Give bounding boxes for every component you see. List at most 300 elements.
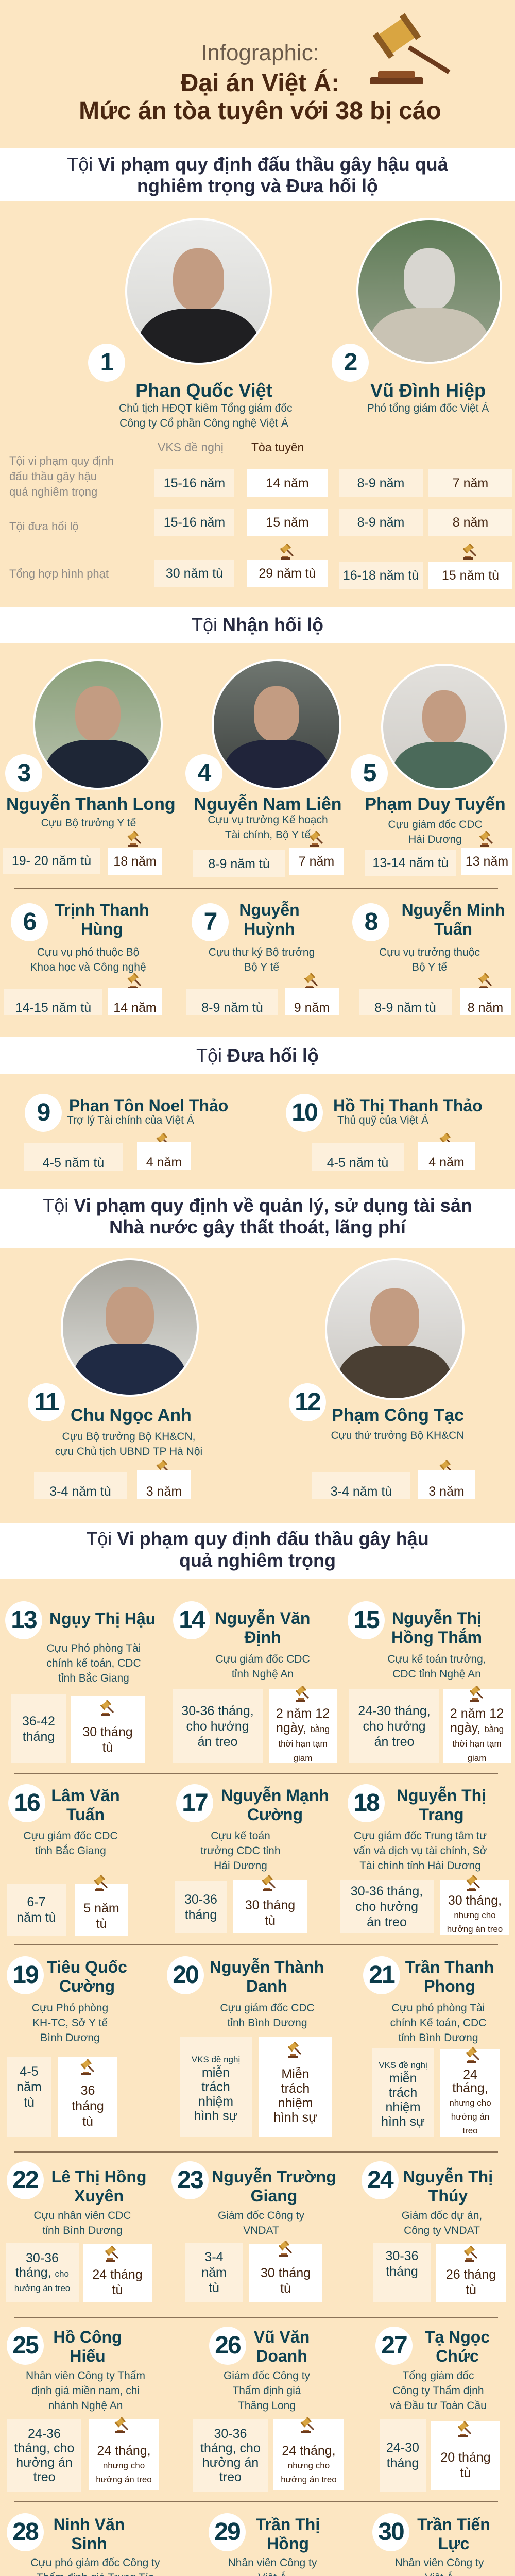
role: Thủ quỹ của Việt Á [337, 1114, 428, 1126]
role: Cựu kế toán [211, 1830, 270, 1842]
role [176, 2208, 346, 2238]
title: Infographic: Infographic: [201, 40, 319, 65]
badge 3: 3 [18, 759, 30, 787]
name [198, 1786, 352, 1824]
section heading: đấu thầu gây hậu quả nghiêm trọng: quả nghiêm trọng [179, 1550, 336, 1571]
badge 29: 29 [214, 2518, 240, 2546]
card: 17 Nguyễn Mạnh Cường: 30-36 [184, 1892, 217, 1906]
card: 27 Tạ Ngọc Chức [353, 2327, 513, 2493]
name [190, 1958, 344, 1996]
name [10, 2328, 165, 2366]
role [353, 2368, 515, 2413]
badge 25: 25 [12, 2332, 38, 2359]
name: Phạm Công Tạc [332, 1405, 464, 1425]
role [182, 2368, 352, 2413]
role: Thẩm định giá [232, 2385, 301, 2397]
card: 19 Tiêu Quốc Cường: tù [24, 2095, 35, 2109]
name: Vũ Đình Hiệp [370, 380, 486, 401]
badge 30: 30 [378, 2518, 404, 2546]
card: 20 Nguyễn Thành Danh: miễn [202, 2065, 230, 2079]
role: Cựu giám đốc CDC [23, 1830, 118, 1842]
card: 21 Trần Thanh Phong: nhưng cho [449, 2098, 491, 2107]
row label 1: Tội vi phạm quy định [9, 454, 114, 467]
badge 3 [5, 754, 42, 792]
badge 17: 17 [182, 1789, 208, 1817]
icon: big gavel [370, 13, 450, 84]
name: Nguyễn Thị [392, 1609, 482, 1628]
card: 5 Phạm Duy Tuyến: 13-14 năm tù [372, 856, 449, 870]
badge 22: 22 [12, 2166, 38, 2194]
photo [33, 659, 163, 790]
card: 12 Phạm Công Tạc: 3-4 năm tù [331, 1484, 392, 1499]
name: Xuyên [74, 2187, 124, 2205]
role [55, 1431, 202, 1458]
role: Công ty VNDAT [404, 2225, 480, 2236]
badge 19: 19 [12, 1961, 38, 1989]
role [178, 1652, 348, 1682]
badge 23: 23 [177, 2166, 203, 2194]
icon: gavel [478, 973, 492, 988]
card: 3 Nguyễn Thanh Long [3, 659, 176, 875]
table: sentences for #1 and #2: 29 năm tù [259, 566, 316, 581]
header court: Tòa tuyên [251, 440, 304, 454]
role [0, 2208, 167, 2238]
section heading: quản lý tài sản Nhà nước: Tội Vi phạm quy định về quản lý, sử dụng tài sản [43, 1195, 472, 1216]
name: Trịnh Thanh [55, 901, 149, 919]
table: sentences for #1 and #2: 15-16 năm [164, 515, 225, 530]
role: Giám đốc Công ty [224, 2370, 310, 2382]
role: và Đầu tư Toàn Cầu [390, 2400, 487, 2412]
card: 14 Nguyễn Văn Định: giam [294, 1753, 312, 1763]
card: 18 Nguyễn Thị Trang: cho hưởng [355, 1899, 418, 1913]
card: 24 Nguyễn Thị Thúy: 30-36 [386, 2249, 418, 2263]
table: sentences for #1 and #2: 16-18 năm tù [343, 568, 419, 583]
name: Sinh [71, 2534, 107, 2553]
role [379, 946, 480, 973]
name: Nguyễn [239, 901, 300, 919]
role [328, 1828, 513, 1873]
card: 24 Nguyễn Thị Thúy: 26 tháng [446, 2267, 496, 2282]
photo [325, 1258, 465, 1400]
name [372, 1958, 515, 1996]
name: Huỳnh [244, 920, 295, 938]
card: 20 Nguyễn Thành Danh: nhiệm [278, 2096, 313, 2110]
role [0, 2001, 155, 2045]
card: 21 Trần Thanh Phong: tháng, [452, 2080, 488, 2095]
icon: gavel [479, 831, 493, 847]
card: 25 Hồ Công Hiếu: treo [33, 2470, 56, 2484]
section heading: Đưa hối lộ: Tội Đưa hối lộ [196, 1045, 319, 1066]
role: tỉnh Bình Dương [42, 2225, 123, 2236]
card: 20 Nguyễn Thành Danh [165, 1956, 340, 2138]
icon: gavel [466, 1875, 482, 1893]
table: sentences for #1 and #2: 7 năm [453, 476, 488, 490]
badge 20: 20 [173, 1961, 198, 1989]
name [22, 2167, 176, 2206]
card: 25 Hồ Công Hiếu: tháng, cho [14, 2441, 74, 2455]
card: 6 Trịnh Thanh Hùng: 14-15 năm tù [15, 1001, 91, 1015]
photo [212, 659, 341, 790]
card: 20 Nguyễn Thành Danh: Miễn [281, 2067, 310, 2081]
role: tỉnh Bắc Giang [58, 1672, 129, 1684]
role: Cựu Bộ trưởng Bộ KH&CN, [62, 1431, 195, 1443]
card: 25 Hồ Công Hiếu: hưởng án [16, 2455, 73, 2470]
icon: gavel [114, 2417, 130, 2435]
name: Định [244, 1628, 281, 1647]
icon: gavel [80, 2059, 96, 2077]
table: sentences for #1 and #2: 8 năm [453, 515, 488, 530]
card: 8 Nguyễn Minh Tuấn [352, 901, 511, 1015]
badge 19 [7, 1956, 44, 1994]
card: 14 Nguyễn Văn Định: 2 năm 12 [276, 1706, 330, 1721]
card: 20 Nguyễn Thành Danh: hình sự [194, 2108, 237, 2123]
name: Hồ Thị Thanh Thảo [333, 1096, 483, 1115]
section heading: quản lý tài sản Nhà nước: Nhà nước gây thất thoát, lãng phí [109, 1216, 406, 1238]
card: 12 Phạm Công Tạc [289, 1258, 475, 1499]
card: 21 Trần Thanh Phong: 24 [463, 2067, 477, 2081]
card: 1 Phan Quốc Việt [88, 344, 293, 429]
badge 24 [362, 2161, 399, 2199]
role [119, 402, 293, 429]
name: Nguyễn Thị [397, 1786, 486, 1805]
icon: gavel [295, 1686, 311, 1703]
card: 26 Vũ Văn Doanh: hưởng án [202, 2455, 259, 2470]
name: Nguyễn Minh [402, 901, 505, 919]
role: Chủ tịch HĐQT kiêm Tổng giám đốc [119, 402, 293, 414]
name: Ngụy Thị Hậu [49, 1609, 156, 1628]
badge 15: 15 [353, 1606, 379, 1634]
name: Danh [246, 1977, 287, 1995]
icon: gavel [262, 1875, 277, 1893]
card: 13 Ngụy Thị Hậu: tháng [23, 1729, 55, 1743]
card: 26 Vũ Văn Doanh: tháng, cho [200, 2441, 261, 2455]
role: Khoa học và Công nghệ [30, 961, 146, 973]
role [353, 2001, 515, 2045]
icon: gavel [100, 1700, 115, 1718]
role: Công ty Thẩm định [392, 2385, 484, 2397]
name: Vũ Văn [254, 2328, 310, 2346]
card: 14 Nguyễn Văn Định [171, 1601, 339, 1764]
name: Phong [424, 1977, 475, 1995]
role: Trợ lý Tài chính của Việt Á [67, 1114, 194, 1126]
icon: gavel [128, 831, 141, 847]
card: 24 Nguyễn Thị Thúy: tháng [386, 2264, 418, 2279]
card: 18 Nguyễn Thị Trang: 30 tháng, [448, 1893, 502, 1907]
icon: gavel [309, 831, 323, 847]
name: Lê Thị Hồng [52, 2167, 146, 2186]
card: 20 Nguyễn Thành Danh: trách [281, 2081, 310, 2096]
card: 23 Nguyễn Trường Giang [170, 2161, 340, 2302]
name [12, 2515, 166, 2553]
name: Phan Tôn Noel Thảo [69, 1096, 228, 1115]
icon: gavel [278, 2241, 294, 2258]
card: 25 Hồ Công Hiếu: nhưng cho [103, 2461, 145, 2470]
role: Tài chính tỉnh Hải Dương [359, 1860, 481, 1872]
role: Cựu Phó phòng [32, 2002, 108, 2014]
card: 3 Nguyễn Thanh Long: 19- 20 năm tù [12, 854, 91, 868]
table: sentences for #1 and #2: 8-9 năm [357, 515, 404, 530]
role [156, 1828, 325, 1873]
card: 18 Nguyễn Thị Trang: 30-36 tháng, [351, 1884, 423, 1898]
card: 16 Lâm Văn Tuấn: năm tù [16, 1910, 56, 1925]
card: 17 Nguyễn Mạnh Cường: 30 tháng [245, 1898, 295, 1912]
card: 27 Tạ Ngọc Chức: tù [460, 2466, 471, 2480]
badge 12: 12 [295, 1388, 320, 1416]
badge 28: 28 [12, 2518, 38, 2546]
role: Cựu nhân viên CDC [33, 2210, 131, 2222]
section heading: đấu thầu gây hậu quả nghiêm trọng [0, 1523, 515, 1579]
badge 26: 26 [215, 2332, 241, 2359]
card: 22 Lê Thị Hồng Xuyên: 30-36 [26, 2251, 59, 2265]
card: 25 Hồ Công Hiếu: 24 tháng, [97, 2444, 151, 2458]
card: 21 Trần Thanh Phong: VKS đề nghị [379, 2060, 427, 2070]
card: 26 Vũ Văn Doanh: 30-36 [214, 2427, 247, 2441]
role [0, 1828, 156, 1858]
badge 5: 5 [363, 759, 375, 787]
card: 29 Trần Thị Hồng [187, 2513, 347, 2576]
name [197, 2167, 351, 2206]
icon: gavel [280, 544, 294, 560]
badge 29 [209, 2513, 246, 2551]
role: Cựu Bộ trưởng Y tế [41, 817, 136, 829]
card: 15 Nguyễn Thị Hồng Thắm: 2 năm 12 [450, 1706, 504, 1721]
section heading: Đưa hối lộ [0, 1037, 515, 1074]
name [380, 2328, 515, 2366]
card: 30 Trần Tiến Lực [354, 2513, 513, 2576]
role: Cựu thư ký Bộ trưởng [209, 946, 315, 958]
card: 18 Nguyễn Thị Trang: nhưng cho [454, 1910, 496, 1920]
role: Cựu giám đốc CDC [220, 2002, 315, 2014]
card: 8 Nguyễn Minh Tuấn: 8-9 năm tù [374, 1001, 436, 1015]
name: Tiêu Quốc [47, 1958, 127, 1976]
role [388, 819, 483, 845]
card: 5 Phạm Duy Tuyến: 13 năm [466, 854, 508, 869]
table: sentences for #1 and #2: 15 năm tù [442, 568, 499, 583]
role [30, 946, 146, 973]
role: Cựu Phó phòng Tài [47, 1642, 141, 1654]
card: 22 Lê Thị Hồng Xuyên: tháng, cho [15, 2265, 69, 2280]
badge 25 [7, 2327, 44, 2365]
badge 14 [173, 1601, 210, 1639]
role [46, 1642, 141, 1684]
card: 17 Nguyễn Mạnh Cường: tháng [185, 1907, 217, 1922]
card: 22 Lê Thị Hồng Xuyên [5, 2161, 160, 2302]
card: 4 Nguyễn Nam Liên: 8-9 năm tù [208, 856, 270, 871]
role: Tổng giám đốc [403, 2370, 474, 2382]
name: Tuấn [66, 1805, 105, 1824]
table: sentences for #1 and #2: 8-9 năm [357, 476, 404, 490]
card: 23 Nguyễn Trường Giang: 3-4 [204, 2250, 224, 2264]
card: 5 Phạm Duy Tuyến [351, 664, 512, 876]
card: 15 Nguyễn Thị Hồng Thắm: giam [468, 1753, 486, 1763]
card: 10 Hồ Thị Thanh Thảo [286, 1094, 483, 1171]
section heading: Vi phạm quy định đấu thầu và Đưa hối lộ [0, 148, 515, 201]
role: vấn và dịch vụ tài chính, Sở [354, 1845, 487, 1857]
name [239, 901, 300, 938]
card: 26 Vũ Văn Doanh: treo [219, 2470, 242, 2484]
card: 14 Nguyễn Văn Định: thời hạn tạm [278, 1738, 328, 1749]
role: KH-TC, Sở Y tế [32, 2017, 108, 2029]
icon: gavel [94, 1875, 109, 1893]
card: 14 Nguyễn Văn Định: án treo [198, 1734, 237, 1749]
photo [61, 1258, 199, 1397]
card: 15 Nguyễn Thị Hồng Thắm: thời hạn tạm [452, 1738, 502, 1749]
role [352, 1652, 515, 1682]
icon: gavel [105, 2246, 120, 2263]
name: Lực [438, 2534, 469, 2553]
photo: Phan Quốc Việt [125, 218, 272, 365]
table: sentences for #1 and #2: 15 năm [266, 515, 309, 530]
role: VNDAT [243, 2225, 279, 2236]
badge 28 [7, 2513, 44, 2551]
name: Hùng [81, 920, 123, 938]
name: Cường [59, 1977, 115, 1995]
role: Bình Dương [40, 2032, 100, 2044]
badge 9 [25, 1094, 62, 1132]
name [359, 1609, 514, 1647]
card: 15 Nguyễn Thị Hồng Thắm: án treo [374, 1734, 414, 1749]
role: Cựu vụ trưởng thuộc [379, 946, 480, 958]
badge 6 [11, 903, 48, 941]
row label 2: Tội đưa hối lộ [9, 520, 79, 533]
row label 1 [9, 454, 114, 498]
title line 2: Mức án tòa tuyên với 38 bị cáo [79, 97, 441, 125]
badge 17 [176, 1784, 213, 1822]
card: 27 Tạ Ngọc Chức: 24-30 [386, 2441, 419, 2455]
card: 21 Trần Thanh Phong: treo [462, 2126, 478, 2135]
card: 23 Nguyễn Trường Giang: tù [280, 2281, 291, 2296]
section heading: Nhận hối lộ [0, 607, 515, 643]
table: sentences for #1 and #2: 15-16 năm [164, 476, 225, 490]
name: Trang [419, 1805, 464, 1824]
badge 16 [8, 1784, 45, 1822]
role [10, 2555, 180, 2576]
row label 1: quả nghiêm trọng [9, 485, 97, 498]
name: Nguyễn Thị [403, 2167, 493, 2186]
section heading: Vi phạm quy định đấu thầu và Đưa hối lộ: nghiêm trọng và Đưa hối lộ [137, 175, 378, 196]
card: 19 Tiêu Quốc Cường: năm [16, 2079, 42, 2094]
role: Cựu giám đốc CDC [388, 819, 483, 831]
name: Giang [251, 2187, 297, 2205]
card: 13 Ngụy Thị Hậu [5, 1601, 156, 1763]
badge 18: 18 [353, 1789, 379, 1817]
badge 18 [348, 1784, 385, 1822]
role: Tài chính, Bộ Y tế [225, 829, 311, 841]
title block [79, 40, 441, 125]
role: Thăng Long [238, 2400, 296, 2412]
role: Giám đốc Công ty [218, 2210, 304, 2222]
badge 21: 21 [369, 1961, 394, 1989]
role: CDC tỉnh Nghệ An [392, 1668, 481, 1680]
card: 14 Nguyễn Văn Định: 30-36 tháng, [181, 1703, 254, 1718]
icon: gavel [466, 2047, 481, 2065]
card: 20 Nguyễn Thành Danh: hình sự [273, 2110, 317, 2125]
role [187, 2555, 357, 2576]
card: 27 Tạ Ngọc Chức: 20 tháng [440, 2450, 491, 2465]
name: Lâm Văn [51, 1786, 120, 1805]
card: 11 Chu Ngọc Anh: 3 năm [146, 1484, 182, 1499]
card: 17 Nguyễn Mạnh Cường [173, 1784, 335, 1935]
name [211, 2515, 365, 2553]
card: 6 Trịnh Thanh Hùng: 14 năm [113, 1001, 157, 1015]
card: 21 Trần Thanh Phong: hưởng án [451, 2111, 489, 2122]
card: 21 Trần Thanh Phong: miễn [389, 2071, 417, 2086]
table: sentences for #1 and #2 [9, 440, 512, 589]
badge 22 [7, 2161, 44, 2199]
card: 18 Nguyễn Thị Trang: án treo [367, 1914, 407, 1929]
badge 11 [28, 1383, 65, 1421]
icon: gavel [464, 2246, 479, 2263]
section heading: đấu thầu gây hậu quả nghiêm trọng: Tội Vi phạm quy định đấu thầu gây hậu [86, 1528, 429, 1549]
card: 11 Chu Ngọc Anh [28, 1258, 202, 1499]
card: 13 Ngụy Thị Hậu: 30 tháng [82, 1725, 133, 1739]
name: Hồng [267, 2534, 309, 2553]
card: 7 Nguyễn Huỳnh [186, 901, 339, 1015]
role [354, 2555, 515, 2576]
name: Tuấn [434, 920, 472, 938]
card: 25 Hồ Công Hiếu [3, 2327, 170, 2493]
icon: gavel [157, 1133, 167, 1142]
badge 8: 8 [365, 908, 377, 936]
badge 5 [351, 754, 388, 792]
card: 16 Lâm Văn Tuấn: tù [96, 1917, 107, 1931]
name: Nguyễn Mạnh [221, 1786, 329, 1805]
card: 16 Lâm Văn Tuấn [5, 1784, 160, 1936]
role: Cựu vụ trưởng Kế hoạch [208, 814, 328, 826]
name [10, 1958, 164, 1996]
icon: gavel [157, 1460, 168, 1470]
card: 13 Ngụy Thị Hậu: 36-42 [22, 1714, 55, 1728]
row label 1: đấu thầu gây hậu [9, 470, 97, 483]
name: Nguyễn Văn [215, 1609, 310, 1628]
badge 4 [185, 754, 222, 792]
role: Phó tổng giám đốc Việt Á [367, 402, 489, 414]
role [182, 2001, 352, 2030]
icon: gavel [300, 2417, 316, 2435]
badge 30 [372, 2513, 409, 2551]
badge 13: 13 [11, 1606, 37, 1634]
badge 7: 7 [204, 908, 216, 936]
badge 9: 9 [37, 1099, 49, 1126]
name [364, 1786, 515, 1824]
badge 23 [171, 2161, 209, 2199]
role: Hải Dương [214, 1860, 267, 1872]
name: Trần Tiến [417, 2515, 490, 2534]
role: Cựu giám đốc CDC [215, 1653, 310, 1665]
card: 23 Nguyễn Trường Giang: 30 tháng [261, 2266, 311, 2280]
badge 14: 14 [179, 1606, 204, 1634]
card: 10 Hồ Thị Thanh Thảo: 4-5 năm tù [327, 1156, 388, 1170]
card: 15 Nguyễn Thị Hồng Thắm: 24-30 tháng, [358, 1703, 431, 1718]
badge 2: 2 [344, 349, 356, 376]
card: 3 Nguyễn Thanh Long: 18 năm [113, 854, 157, 869]
card: 24 Nguyễn Thị Thúy [357, 2161, 511, 2302]
badge 1 [88, 344, 125, 382]
role: Cựu phó phòng Tài [392, 2002, 485, 2014]
card: 22 Lê Thị Hồng Xuyên: hưởng án treo [14, 2283, 70, 2293]
badge 12 [289, 1383, 326, 1421]
card: 7 Nguyễn Huỳnh: 8-9 năm tù [201, 1001, 263, 1015]
card: 20 Nguyễn Thành Danh: nhiệm [198, 2094, 233, 2108]
name: Doanh [256, 2347, 307, 2365]
name [402, 901, 505, 938]
card: 20 Nguyễn Thành Danh: VKS đề nghị [192, 2055, 240, 2064]
badge 21 [363, 1956, 400, 1994]
role: Nhân viên Công ty Thẩm [26, 2370, 145, 2382]
name: Tạ Ngọc [425, 2328, 490, 2346]
badge 7 [192, 903, 229, 941]
name: Phạm Duy Tuyến [365, 794, 506, 814]
